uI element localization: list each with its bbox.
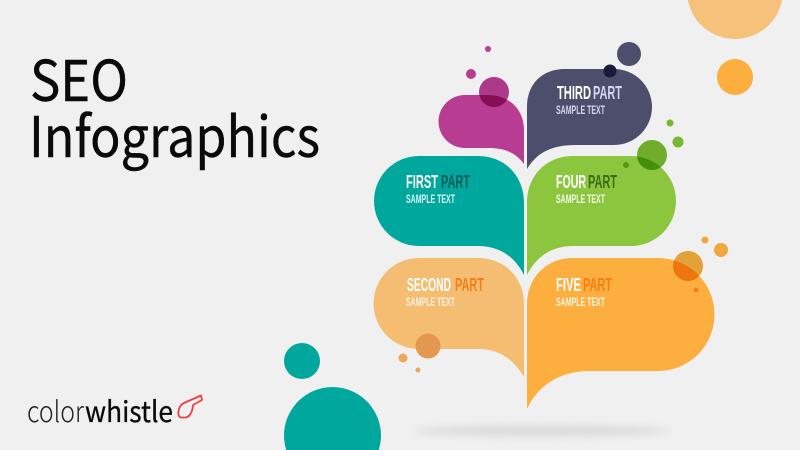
text: sample text: SAMPLE TEXT xyxy=(556,103,605,117)
dark circles xyxy=(604,42,641,78)
text: sample text: SAMPLE TEXT xyxy=(556,295,605,309)
panel: third part xyxy=(527,42,652,169)
heading: second part: SECOND xyxy=(407,274,451,295)
text: sample text: SAMPLE TEXT xyxy=(406,192,455,206)
heading: first part: PART xyxy=(441,171,470,192)
title: Infographics xyxy=(29,93,320,174)
decorative circle: top right large xyxy=(688,0,782,39)
panel: four part xyxy=(527,120,684,275)
title: SEO xyxy=(30,37,128,118)
heading: five part: FIVE xyxy=(556,274,581,295)
panel: five part xyxy=(527,236,728,409)
decorative circle: top right small xyxy=(717,59,753,95)
title xyxy=(29,37,320,174)
decorative circle: bottom small teal xyxy=(284,343,320,379)
orange circles xyxy=(398,334,440,372)
text: sample text: SAMPLE TEXT xyxy=(556,192,605,206)
logo: colorwhistle: color xyxy=(27,389,84,431)
magenta circles xyxy=(466,46,509,107)
decorative circle: bottom large teal xyxy=(284,387,381,450)
panel: first part xyxy=(374,156,524,275)
heading: four part: PART xyxy=(588,171,617,192)
ground shadow xyxy=(414,426,670,436)
icon: whistle xyxy=(178,396,202,418)
logo: colorwhistle: whistle xyxy=(85,389,173,431)
heading: third part: THIRD xyxy=(557,82,591,103)
heading: third part: PART xyxy=(593,82,622,103)
panel: magenta speech bubble xyxy=(439,46,524,164)
logo: colorwhistle xyxy=(27,389,202,431)
heading: five part: PART xyxy=(583,274,612,295)
heading: four part: FOUR xyxy=(556,171,586,192)
text: sample text: SAMPLE TEXT xyxy=(406,295,455,309)
orange circles xyxy=(673,236,728,292)
green circles xyxy=(623,120,684,170)
heading: first part: FIRST xyxy=(406,171,438,192)
panel: second part xyxy=(374,258,524,377)
heading: second part: PART xyxy=(455,274,484,295)
